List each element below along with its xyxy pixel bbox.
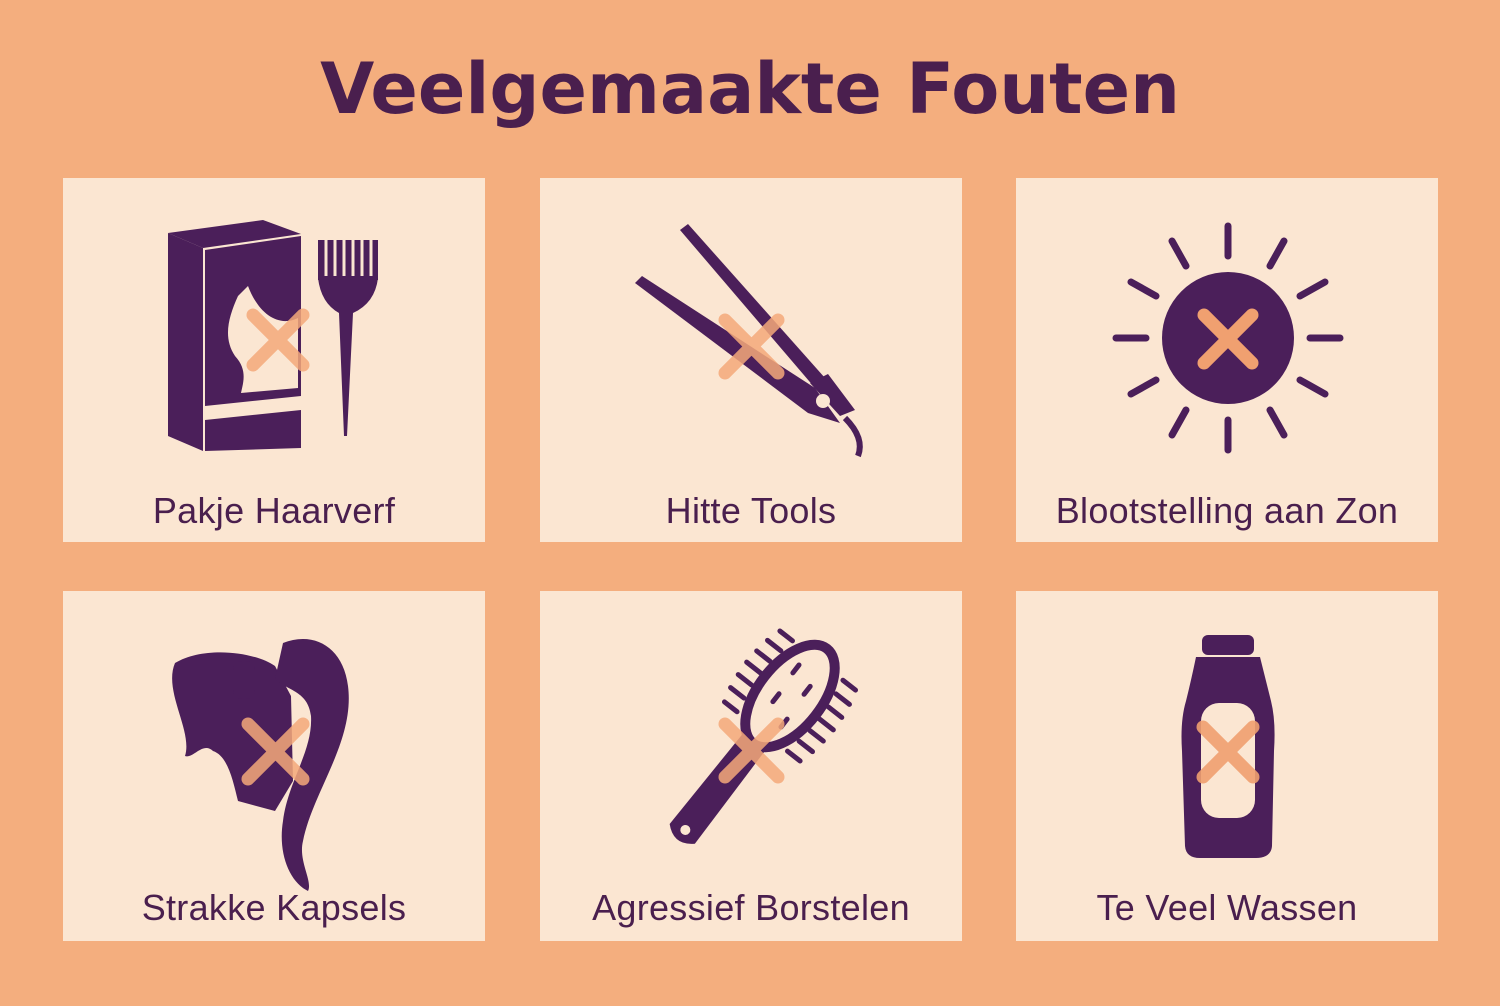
icon: sun (1112, 222, 1344, 454)
icon: shampoo bottle (1182, 635, 1275, 858)
panel: Hitte Tools (540, 178, 962, 542)
panel: Strakke Kapsels (63, 591, 485, 941)
label: Agressief Borstelen (592, 887, 910, 928)
panel: Te Veel Wassen (1016, 591, 1438, 941)
icon: ponytail (172, 639, 349, 891)
icon: hair brush (670, 628, 858, 844)
panel: Blootstelling aan Zon (1016, 178, 1438, 542)
label: Hitte Tools (666, 490, 836, 531)
label: Blootstelling aan Zon (1056, 490, 1398, 531)
icon: hair dye box and brush (168, 220, 378, 451)
label: Te Veel Wassen (1096, 887, 1358, 928)
panel: Pakje Haarverf (63, 178, 485, 542)
label: Strakke Kapsels (142, 887, 406, 928)
label: Pakje Haarverf (153, 490, 395, 531)
panel: Agressief Borstelen (540, 591, 962, 941)
icon: hair straightener (635, 224, 863, 458)
title: Veelgemaakte Fouten (320, 48, 1180, 130)
